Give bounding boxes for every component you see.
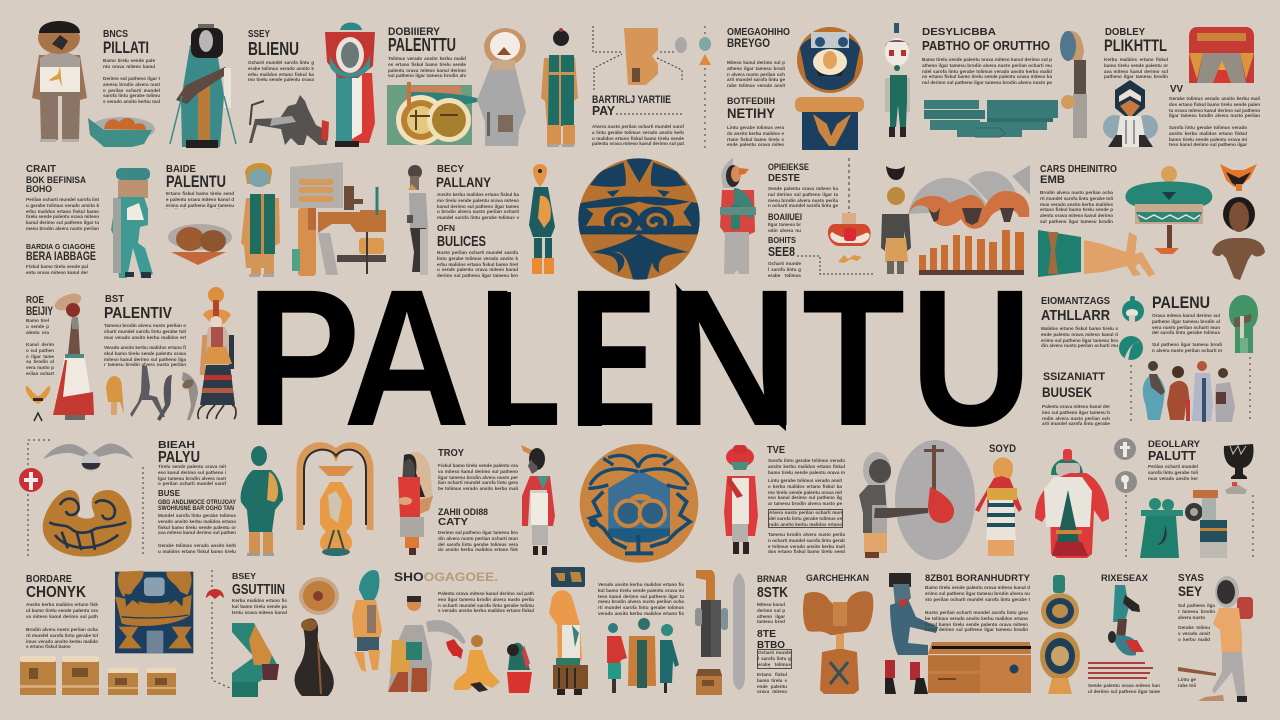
heading: OPIEIEKSE DESTE <box>768 162 809 184</box>
heading: DESYLICBBA PABTHO OF ORUTTHO: PABTHO OF ORUTTHO <box>922 38 1050 53</box>
icon: teal stone structure <box>924 100 1058 137</box>
icon: grey strip <box>733 573 745 690</box>
heading: BST PALENTIV: BST <box>105 294 124 305</box>
icon: small wooden crate <box>696 669 722 695</box>
heading: PALENU: PALENU <box>1152 293 1210 312</box>
heading: ZAHII ODI88 CATY: ZAHII ODI88 <box>438 507 488 518</box>
icon: bread dish <box>168 224 232 265</box>
icon: tribal circle emblem upper <box>578 158 700 280</box>
heading: EIOMANTZAGS ATHLLARR: ATHLLARR <box>1041 307 1110 324</box>
text block sey one: Sul patheno ilgar tamesu brodin alvera nusto <box>1178 603 1215 620</box>
heading: BSEY GSUTTIIN: BSEY <box>232 571 256 581</box>
heading: 8ZB01 BORANHUDRTY: 8ZB01 BORANHUDRTY <box>925 573 1031 584</box>
heading: DEOLLARY PALUTT: PALUTT <box>1148 448 1196 463</box>
heading: ZAHII ODI88 CATY <box>438 507 488 528</box>
heading: OMEGAOHIHO BREYGO: BREYGO <box>727 36 770 50</box>
figure: white and red slender person <box>521 445 555 555</box>
heading: OPIEIEKSE DESTE: DESTE <box>768 173 800 184</box>
heading: EIOMANTZAGS ATHLLARR: EIOMANTZAGS <box>1041 296 1110 307</box>
heading: RIXESEAX: RIXESEAX <box>1101 573 1149 584</box>
heading: DOBLEY PLIKHTTL: DOBLEY <box>1105 27 1145 38</box>
heading: BRNAR 8STK: 8STK <box>757 584 788 601</box>
heading: CRAIT BOK BEFINISA BOHO <box>26 164 86 194</box>
heading: dense sub heading: SWOHIUSNE BAR OGHO TAN <box>158 506 234 512</box>
icon: grey arches with masks <box>908 165 1030 229</box>
icon: grey tool with orange handle <box>695 570 728 657</box>
figure: grey person blue hood <box>1060 31 1087 138</box>
heading: CRAIT BOK BEFINISA BOHO: CRAIT <box>26 164 56 175</box>
heading: SSEY BLIENU: SSEY <box>248 29 270 40</box>
figures: small orange and grey row <box>106 366 198 421</box>
title: PALENTU: N <box>664 249 799 467</box>
figure: grey cat <box>249 95 329 145</box>
heading: BNCS PILLATI <box>103 28 149 57</box>
heading: BRNAR 8STK: BRNAR <box>757 574 787 585</box>
icon: dashed lines beside row three <box>1131 357 1250 423</box>
heading: BORDARE CHONYK: BORDARE <box>26 574 72 585</box>
figure: grey shawl person with long scythe <box>388 596 466 692</box>
figure: red and grey bearded person <box>720 158 756 274</box>
heading: CARS DHEINITRO EMB: CARS DHEINITRO <box>1040 164 1117 175</box>
heading: SYAS SEY: SEY <box>1178 583 1203 599</box>
lines: red rules <box>1088 662 1153 679</box>
heading: BARTIRLJ YARTIIE PAY: PAY <box>592 103 615 118</box>
figure: striped dress woman <box>975 458 1022 556</box>
icon: tribal circle emblem lower <box>580 444 698 563</box>
icon: tan jug <box>624 28 687 85</box>
heading: BARDIA G CIAGOHE BERA IABBAGE <box>26 242 96 263</box>
heading: ZAHII ODI88 CATY: CATY <box>438 517 468 528</box>
icon: red splash <box>446 639 463 659</box>
figure: thin person with white mask <box>885 23 910 137</box>
icon: red arc with dashed line <box>206 570 230 688</box>
icons: carved wooden blocks <box>20 656 176 695</box>
heading: BECY PALLANY <box>436 164 492 190</box>
heading: BAIDE PALENTU: PALENTU <box>166 172 226 191</box>
heading: GARCHEHKAN: GARCHEHKAN <box>806 573 869 584</box>
title: PALENTU: E <box>569 249 657 467</box>
heading: CRAIT BOK BEFINISA BOHO: BOHO <box>26 184 52 194</box>
heading: BIEAH PALYU <box>158 440 200 466</box>
icon: teal drop and orange arrow <box>699 26 711 148</box>
figure: seated orange person <box>454 635 500 692</box>
heading: DESYLICBBA PABTHO OF ORUTTHO: DESYLICBBA <box>922 26 996 38</box>
figure: tall red striped skirt woman <box>198 287 236 419</box>
heading: BNCS PILLATI: PILLATI <box>103 38 149 57</box>
heading: BST PALENTIV <box>104 294 172 322</box>
heading: BRNAR 8STK <box>757 574 788 601</box>
figure: person with orange skirt <box>881 166 911 274</box>
heading: DEOLLARY PALUTT: DEOLLARY <box>1148 439 1201 450</box>
figure: woman head and torso <box>1212 197 1265 280</box>
heading: DESYLICBBA PABTHO OF ORUTTHO <box>922 26 1050 53</box>
panel: gold coins on green <box>387 82 482 145</box>
icon: grey oval with lute <box>895 440 975 560</box>
heading: SYAS SEY <box>1178 573 1204 599</box>
heading: SSEY BLIENU: BLIENU <box>248 39 299 59</box>
figure: teal scrubs person <box>111 168 153 278</box>
heading: OFN BULICES: OFN <box>437 223 455 233</box>
icon: food dish <box>88 117 155 147</box>
icon: double urn <box>1040 575 1080 694</box>
heading: BECY PALLANY: BECY <box>437 164 464 175</box>
heading: 8TE BTBO <box>757 629 785 651</box>
heading: BSEY GSUTTIIN <box>232 571 285 598</box>
heading: CARS DHEINITRO EMB: EMB <box>1040 174 1065 186</box>
heading: DOBIIIERY PALENTTU <box>388 26 456 55</box>
figure: seated man at desk <box>885 573 938 694</box>
icon: carved brown horseshoe <box>43 490 132 557</box>
heading: BORDARE CHONYK <box>26 574 86 601</box>
panel: carved wood totem <box>115 571 193 653</box>
icon: navy box with orange star <box>795 97 864 150</box>
figure: red and white ceremonial robe <box>1035 449 1109 558</box>
heading: BOHITS SEE8: BOHITS <box>768 235 796 245</box>
figure: grey man playing lute <box>859 452 928 558</box>
heading: 8TE BTBO: 8TE <box>757 629 776 640</box>
icon: dashes at right of row four <box>1126 495 1253 557</box>
icon: red lantern with dashes <box>797 158 873 274</box>
figure: brown man with apron <box>32 21 87 142</box>
heading: BOHITS SEE8: SEE8 <box>768 245 795 259</box>
heading: EIOMANTZAGS ATHLLARR <box>1041 296 1110 324</box>
figure: green person with sash <box>241 446 283 556</box>
icon: teal and orange stairs <box>232 623 279 697</box>
heading: BARDIA G CIAGOHE BERA IABBAGE: BERA IABBAGE <box>26 249 96 263</box>
heading: BOAIIUEI: BOAIIUEI <box>768 212 802 223</box>
heading: BOTFEDIIH NETIHY: NETIHY <box>727 105 776 121</box>
heading: BUSE: BUSE <box>158 489 181 498</box>
heading: TROY: TROY <box>438 447 464 459</box>
figures: four standing people <box>1143 361 1235 422</box>
heading: BSEY GSUTTIIN: GSUTTIIN <box>232 581 285 598</box>
heading: BOTFEDIIH NETIHY <box>727 96 776 121</box>
heading: BOTFEDIIH NETIHY: BOTFEDIIH <box>727 96 775 106</box>
heading: ROE BEIJIY <box>26 295 53 318</box>
heading: OFN BULICES <box>437 223 486 250</box>
figure: person in grey hood with backpack <box>1178 576 1253 702</box>
icon: dashed connector <box>593 26 682 114</box>
icon: tribal mask <box>797 27 863 93</box>
heading: DOBIIIERY PALENTTU: DOBIIIERY <box>388 26 441 38</box>
figure: grey man with tan hood <box>477 28 526 146</box>
icon: teal pedestal <box>1140 498 1183 558</box>
figures: three small people <box>607 618 679 693</box>
figure: orange robed person with white apron <box>549 590 588 695</box>
figure: red shirt long hair woman <box>398 452 433 555</box>
figure: orange coat teal hood <box>352 570 382 672</box>
figure: orange hood teal dress <box>529 164 555 274</box>
figure: small industrial figure <box>1185 490 1227 558</box>
icon: compass disc <box>299 577 339 615</box>
icon: orange arch with vase <box>300 446 370 556</box>
bar chart: orange bars <box>919 230 1024 275</box>
heading: BST PALENTIV: PALENTIV <box>104 305 172 322</box>
icon: teal hat on stand <box>1125 166 1212 254</box>
heading: CARS DHEINITRO EMB <box>1040 164 1117 186</box>
title: PALENTU: A <box>343 249 471 467</box>
heading: BNCS PILLATI: BNCS <box>103 28 128 40</box>
figure: green keyhole <box>1229 295 1258 353</box>
heading: SSIZANIATT BUUSEK: BUUSEK <box>1042 384 1092 400</box>
heading: DOBLEY PLIKHTTL: PLIKHTTL <box>1104 36 1167 55</box>
figure: green and orange person <box>541 28 578 147</box>
icon: teal circle icons <box>1119 296 1144 362</box>
figure: green and orange person with cap <box>241 163 280 277</box>
heading: SSIZANIATT BUUSEK: SSIZANIATT <box>1043 371 1105 383</box>
icon: armored shield figure <box>1103 80 1158 147</box>
figure: grey shirt dark pants <box>407 165 428 275</box>
icon: grey bird <box>43 444 133 472</box>
icon: loom machine <box>290 162 386 276</box>
title: PALENTU: T <box>802 249 905 467</box>
heading: OMEGAOHIHO BREYGO <box>727 27 790 50</box>
heading: DEOLLARY PALUTT <box>1148 439 1201 463</box>
icon: orange wings <box>26 386 50 421</box>
heading: SHOOGAGOEE two tone: SHO OGAGOEE. <box>394 570 498 584</box>
heading: 8TE BTBO: BTBO <box>757 640 785 651</box>
heading: ROE BEIJIY: ROE <box>26 295 44 306</box>
heading: TVE: TVE <box>767 445 785 456</box>
heading: BAIDE PALENTU <box>166 164 226 191</box>
title: PALENTU <box>246 249 1033 467</box>
heading: SSEY BLIENU <box>248 29 299 59</box>
heading: OFN BULICES: BULICES <box>437 233 486 250</box>
heading: BARDIA G CIAGOHE BERA IABBAGE: BARDIA G CIAGOHE <box>26 242 95 251</box>
heading: BIEAH PALYU: BIEAH <box>158 440 195 451</box>
icon: grey round symbols <box>1114 438 1137 493</box>
heading: BAIDE PALENTU: BAIDE <box>166 164 196 175</box>
title: PALENTU: L <box>479 249 561 467</box>
figure: teal and red cloaked person <box>325 22 375 147</box>
icon: black cup and small tray <box>1224 444 1254 494</box>
heading: SYAS SEY: SYAS <box>1178 573 1204 584</box>
figure: person in red bucket <box>507 643 532 693</box>
figure: teal abstract dancer <box>1108 585 1144 656</box>
icon: orange bird mask <box>1220 164 1257 191</box>
heading: BORDARE CHONYK: CHONYK <box>26 584 86 601</box>
heading: BARTIRLJ YARTIIE PAY: BARTIRLJ YARTIIE <box>592 94 671 106</box>
heading: BARTIRLJ YARTIIE PAY <box>592 94 671 118</box>
figure: red robed person with bowl hat <box>724 445 758 554</box>
icon: red and orange temple <box>1189 27 1254 83</box>
heading: BIEAH PALYU: PALYU <box>158 449 200 466</box>
figure: black and brown silhouette <box>295 618 334 696</box>
heading: BECY PALLANY: PALLANY <box>436 174 492 190</box>
heading: BOHITS SEE8 <box>768 235 796 259</box>
heading: ROE BEIJIY: BEIJIY <box>26 304 53 318</box>
icon: teal and tan pipe <box>1038 230 1155 277</box>
heading: OPIEIEKSE DESTE: OPIEIEKSE <box>768 162 809 173</box>
heading: OMEGAOHIHO BREYGO: OMEGAOHIHO <box>727 27 790 38</box>
icon: navy sign <box>551 567 585 587</box>
heading: dense sub heading: GBG ANDLIMOCE OTRUJOAY <box>158 499 237 506</box>
heading: VV: VV <box>1170 84 1183 95</box>
heading: SOYD: SOYD <box>989 443 1016 455</box>
title: PALENTU: U <box>910 249 1033 467</box>
text block chonyk two: Brodin alvera nusto perilan ocharti mundel sarofa lintu gerabe tolimus verado ansito kerbu malidos ertano fiskul bamo <box>26 627 98 649</box>
heading: DOBIIIERY PALENTTU: PALENTTU <box>388 35 456 55</box>
icon: brown wooden chest <box>928 642 1031 693</box>
icon: dashed frame <box>28 440 143 557</box>
heading: dense sub heading <box>158 499 237 512</box>
icon: red cross circle <box>19 468 43 492</box>
heading: DOBLEY PLIKHTTL <box>1104 27 1167 55</box>
icon: brown saddle and bag <box>803 591 873 694</box>
figure: red and white skirt person <box>52 290 94 420</box>
heading: CRAIT BOK BEFINISA BOHO: BOK BEFINISA <box>26 175 86 186</box>
heading: SSIZANIATT BUUSEK <box>1042 371 1105 400</box>
title: PALENTU: P <box>246 249 360 467</box>
figure: teal robe with black hood <box>170 24 236 148</box>
